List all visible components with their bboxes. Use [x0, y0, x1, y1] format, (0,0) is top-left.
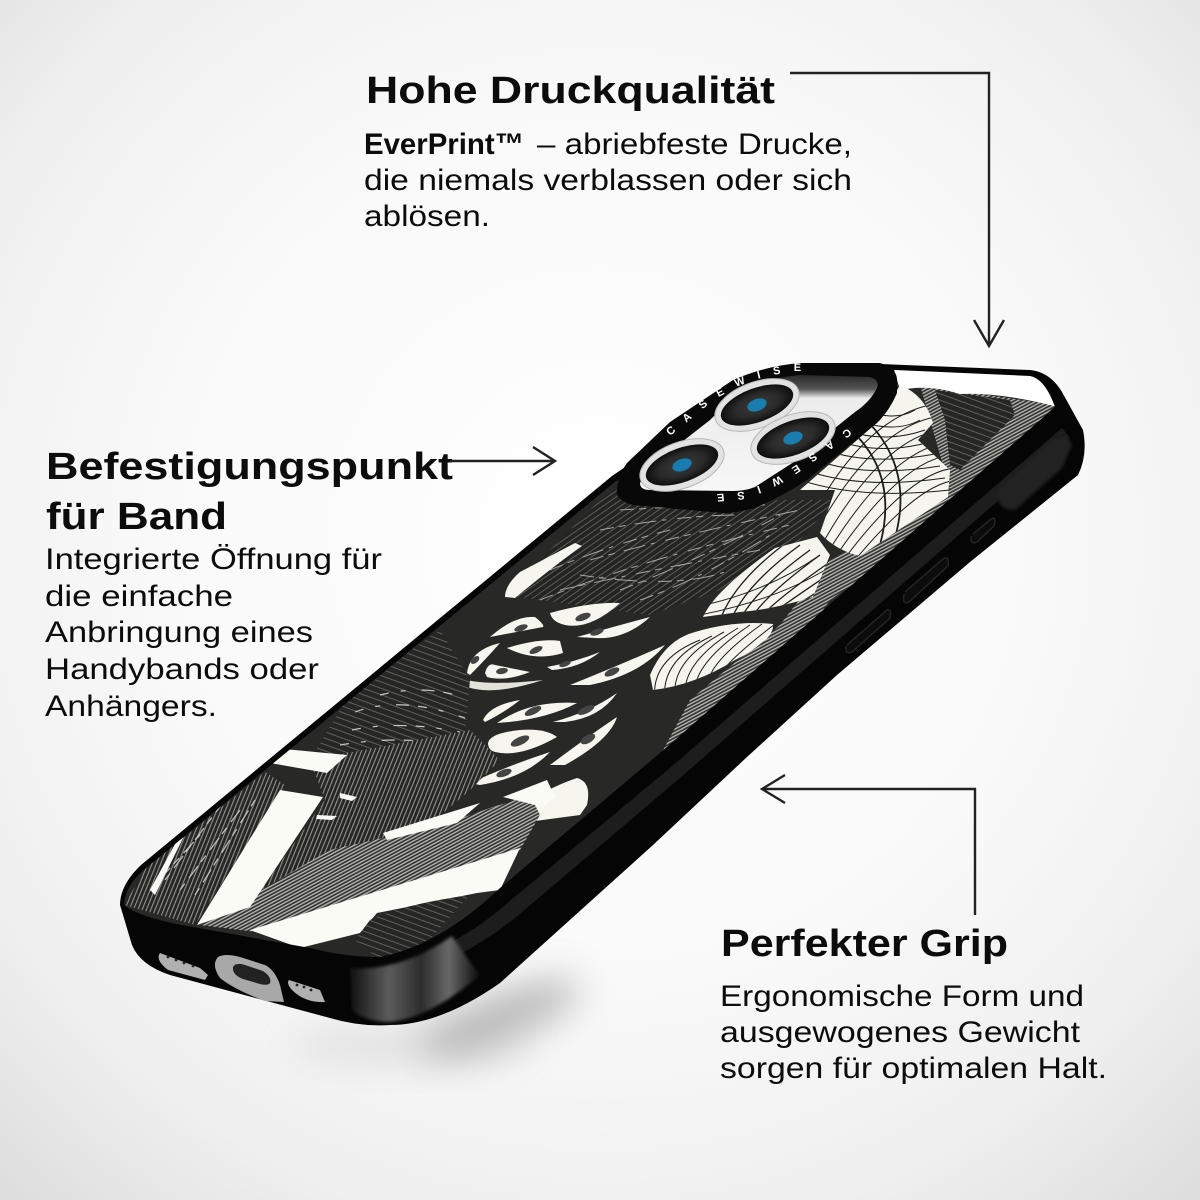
body text: ausgewogenes Gewicht — [720, 1016, 1081, 1049]
shell C — [650, 623, 774, 690]
ring brand text: CASEWISE — [666, 364, 801, 434]
phone case illustration — [120, 363, 1085, 1026]
case body — [120, 364, 1085, 1025]
camera module — [616, 363, 897, 513]
shell B — [703, 537, 830, 617]
hatched left corner — [124, 772, 285, 925]
body text — [364, 128, 852, 233]
heading: für Band — [46, 496, 227, 538]
ring brand text — [666, 364, 851, 502]
eye shapes — [467, 602, 665, 821]
hatched lower panel — [262, 730, 500, 890]
lower dark patch — [355, 895, 470, 960]
corner sheen — [350, 936, 480, 1022]
body text: ablösen. — [364, 200, 490, 233]
heading: Perfekter Grip — [721, 923, 1008, 965]
body text: die einfache — [45, 580, 233, 613]
heading: Befestigungspunkt — [46, 446, 453, 488]
heading: Hohe Druckqualität — [366, 70, 775, 112]
body text — [720, 980, 1107, 1085]
left corner flecks — [150, 800, 255, 895]
arrow: print quality — [790, 73, 1004, 346]
mid hatching right — [660, 385, 1056, 756]
arrow: strap attachment — [450, 447, 555, 475]
hatched band — [200, 795, 540, 935]
arrow: grip — [762, 775, 975, 915]
body text: Integrierte Öffnung für — [45, 543, 382, 576]
body text: – abriebfeste Drucke, — [537, 128, 852, 161]
body text: Handybands oder — [45, 653, 319, 686]
lens top — [708, 368, 806, 442]
side button: volume up — [904, 558, 948, 603]
ring brand text: CASEWISE — [717, 430, 851, 502]
heading — [46, 446, 453, 538]
callout: grip — [720, 923, 1107, 1085]
body text: Anbringung eines — [45, 616, 313, 649]
lens left — [633, 428, 731, 502]
dark patch upper right — [935, 390, 1015, 470]
body text: Ergonomische Form und — [720, 980, 1084, 1013]
printed artwork — [120, 360, 1070, 960]
callout: strap attachment — [45, 446, 453, 723]
port: usb-c — [215, 955, 284, 1002]
phone shadow — [290, 964, 588, 1072]
body text: die niemals verblassen oder sich — [364, 164, 852, 197]
body text: EverPrint™ — [364, 128, 524, 161]
body text: Anhängers. — [45, 690, 217, 723]
body text: sorgen für optimalen Halt. — [720, 1052, 1107, 1085]
callout: print quality — [364, 70, 852, 233]
shell A — [800, 385, 950, 556]
white stripe upper — [505, 543, 582, 598]
side blob — [998, 438, 1072, 510]
eye pupils — [470, 612, 620, 778]
eyes cluster — [467, 543, 665, 821]
dark quad — [310, 630, 470, 760]
side button: volume down — [846, 610, 891, 653]
camera bump ring — [617, 363, 897, 513]
quad flecks — [340, 690, 465, 745]
camera plate — [640, 375, 878, 491]
artwork base — [120, 360, 1070, 960]
lens right — [744, 401, 842, 475]
case side highlight — [390, 428, 1070, 978]
white blocks — [150, 748, 555, 948]
port: left speaker — [159, 953, 208, 980]
body text — [45, 543, 382, 723]
dark feathers under camera — [505, 485, 835, 615]
port: right speaker — [288, 980, 325, 1002]
side button: action — [971, 518, 995, 543]
white corner top — [894, 370, 1055, 406]
feather texture — [540, 505, 800, 600]
